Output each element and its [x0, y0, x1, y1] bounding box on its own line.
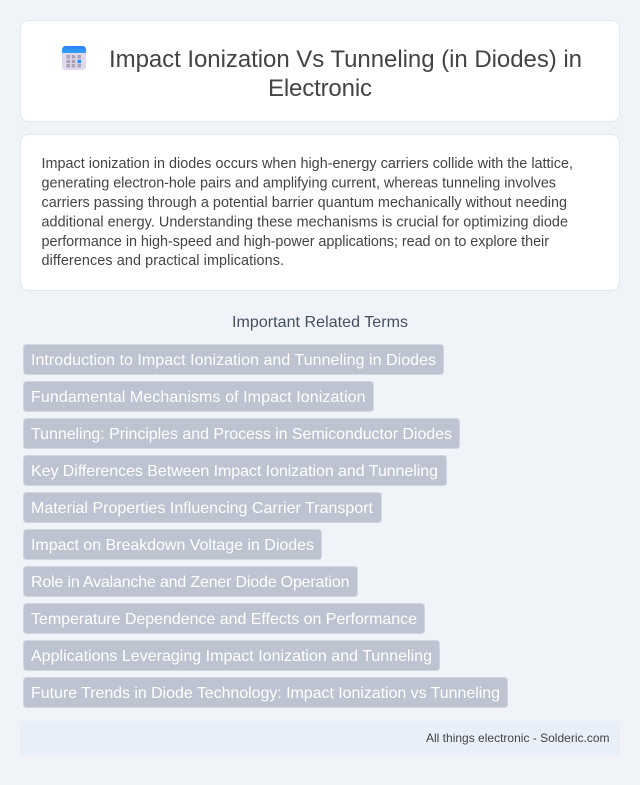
tag 7: Role in Avalanche and Zener Diode Operation [31, 574, 350, 591]
text block: introduction paragraph: additional energy. Understanding these mechanisms is crucial for optimizing diode [42, 214, 568, 230]
tag 10 [24, 678, 508, 708]
tag 4: Key Differences Between Impact Ionization and Tunneling [31, 463, 438, 480]
tag 1 [24, 344, 444, 374]
tag 8: Temperature Dependence and Effects on Performance [31, 611, 417, 628]
panel: title card [20, 20, 620, 122]
tag 5: Material Properties Influencing Carrier Transport [31, 500, 374, 517]
text block: introduction paragraph [42, 156, 573, 269]
footer: All things electronic - Solderic.com [426, 731, 610, 745]
title [109, 46, 582, 102]
text block: introduction paragraph: performance in high-speed and high-power applications; read on to explore their [42, 234, 549, 250]
text block: introduction paragraph: differences and practical implications. [42, 253, 284, 269]
panel: introduction text [20, 134, 620, 290]
tag 3 [24, 418, 460, 448]
tag 5 [24, 492, 382, 522]
text block: introduction paragraph: generating electron-hole pairs and amplifying current, whereas tunneling involves [42, 176, 556, 192]
tag 4 [24, 456, 446, 486]
heading: important related terms: Important Related Terms [232, 314, 408, 331]
tag 10: Future Trends in Diode Technology: Impact Ionization vs Tunneling [31, 685, 500, 702]
title: Electronic [268, 75, 372, 102]
text block: introduction paragraph: Impact ionization in diodes occurs when high-energy carriers collide with the lattice, [42, 156, 573, 172]
tag 2: Fundamental Mechanisms of Impact Ionization [31, 389, 366, 406]
tag 6 [24, 530, 322, 560]
footer [20, 721, 620, 755]
list: related term tags [24, 344, 508, 708]
text block: introduction paragraph: carriers passing through a potential barrier quantum mechanically without needing [42, 195, 567, 211]
tag 9 [24, 640, 440, 670]
tag 1: Introduction to Impact Ionization and Tunneling in Diodes [31, 352, 436, 369]
tag 2 [24, 382, 374, 412]
tag 3: Tunneling: Principles and Process in Semiconductor Diodes [31, 426, 452, 443]
icon: calendar grid [62, 46, 86, 70]
tag 6: Impact on Breakdown Voltage in Diodes [31, 537, 314, 554]
tag 9: Applications Leveraging Impact Ionization and Tunneling [31, 648, 432, 665]
tag 8 [24, 604, 424, 634]
title: Impact Ionization Vs Tunneling (in Diodes) in [109, 46, 582, 73]
tag 7 [24, 566, 358, 596]
